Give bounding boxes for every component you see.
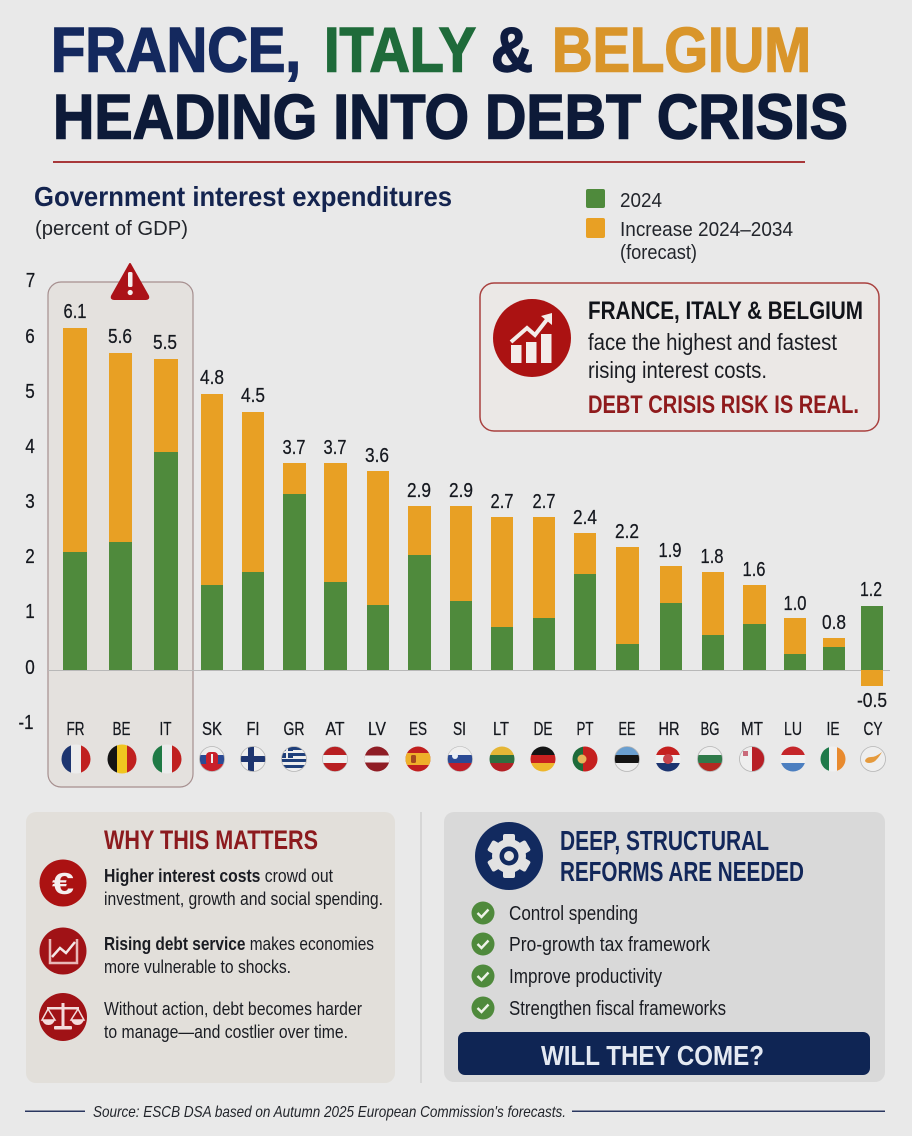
- bar: AT: [324, 437, 347, 670]
- highlight box: France, Belgium, Italy: [48, 282, 193, 787]
- bar: LU: [784, 593, 806, 670]
- item: control spending: [472, 902, 638, 925]
- y axis labels: 3: [25, 491, 35, 513]
- text: rising debt service: more vulnerable to shocks.: [104, 957, 291, 977]
- item: control spending: Control spending: [509, 903, 638, 925]
- bar: LT: 2.7: [490, 491, 514, 513]
- icon: gear: [475, 822, 543, 890]
- flag: Luxembourg: [781, 746, 805, 772]
- legend: [586, 189, 793, 264]
- y axis labels: 1: [25, 601, 35, 623]
- bar: CY: [857, 579, 887, 712]
- country codes: IE: [826, 719, 840, 739]
- flag: Ireland: [820, 747, 846, 771]
- flag: Slovenia: [447, 746, 473, 772]
- icon: declining chart: [40, 928, 86, 974]
- bar: LU: 1.0: [784, 593, 806, 615]
- bar: IE: [822, 612, 846, 670]
- bar: LV: 3.6: [365, 445, 389, 467]
- icon: warning triangle: [112, 264, 148, 299]
- panel heading: REFORMS ARE NEEDED: [560, 856, 804, 887]
- source line: Source: ESCB DSA based on Autumn 2025 European Commission's forecasts.: [93, 1104, 566, 1121]
- flag: Latvia: [364, 746, 390, 772]
- text: without action: to manage—and costlier over time.: [104, 1022, 348, 1042]
- country codes: FI: [246, 719, 260, 739]
- bar: SK: [200, 367, 224, 670]
- flag: France: [61, 744, 91, 774]
- bar: BG: 1.8: [700, 546, 724, 568]
- callout text: rising interest costs.: [588, 357, 767, 383]
- flag: Austria: [322, 746, 348, 772]
- bar: HR: 1.9: [658, 540, 682, 562]
- title: FRANCE,: [51, 15, 301, 85]
- bar: ES: 2.9: [407, 480, 431, 502]
- bar: GR: [282, 437, 306, 670]
- icon: euro: €: [52, 866, 74, 901]
- title: BELGIUM: [552, 15, 811, 85]
- title: ITALY: [324, 15, 476, 85]
- flag: Bulgaria: [697, 746, 723, 772]
- bar: BE: 5.6: [108, 326, 132, 348]
- bar: EE: [615, 521, 639, 670]
- y axis labels: 7: [26, 270, 35, 292]
- country codes: LT: [493, 719, 509, 739]
- bar: PT: [573, 507, 597, 670]
- country codes: GR: [284, 719, 305, 739]
- bar: IE: 0.8: [822, 612, 846, 634]
- flag: Slovakia: [199, 746, 225, 772]
- bar: CY: 1.2: [860, 579, 882, 601]
- bar: ES: [407, 480, 431, 670]
- panel heading: WHY THIS MATTERS: [104, 825, 318, 855]
- bar: FR: [63, 301, 87, 670]
- country codes: BG: [700, 719, 720, 739]
- bar: HR: [658, 540, 682, 670]
- item: pro-growth tax framework: Pro-growth tax framework: [509, 934, 711, 956]
- y axis labels: [18, 270, 35, 734]
- y axis labels: 0: [25, 657, 35, 679]
- country codes: SK: [202, 719, 222, 739]
- panel heading: [560, 825, 804, 887]
- country codes: MT: [741, 719, 763, 739]
- country codes: SI: [453, 719, 466, 739]
- icon: rising chart: [493, 299, 571, 377]
- text: without action: [104, 999, 362, 1042]
- button: will they come: [458, 1032, 870, 1075]
- y axis labels: 4: [25, 436, 35, 458]
- flag: Malta: [739, 746, 765, 772]
- flag: Italy: [152, 744, 182, 774]
- button: will they come: WILL THEY COME?: [541, 1040, 764, 1071]
- country codes: PT: [576, 719, 594, 739]
- flag: Belgium: [107, 744, 137, 774]
- text: rising debt service: [104, 934, 374, 977]
- country codes: FR: [66, 719, 84, 739]
- country codes: IT: [160, 719, 172, 739]
- checklist: [472, 902, 726, 1020]
- text: without action: Without action, debt becomes harder: [104, 999, 362, 1019]
- country codes: ES: [409, 719, 427, 739]
- callout text: [588, 297, 863, 419]
- bar: MT: [742, 559, 766, 670]
- bar: PT: 2.4: [573, 507, 597, 529]
- bar: BG: [700, 546, 724, 670]
- flag: Germany: [530, 746, 556, 772]
- legend: 2024: [620, 190, 662, 212]
- text: higher interest costs: [104, 866, 383, 909]
- title: HEADING INTO DEBT CRISIS: [53, 82, 848, 152]
- bar: GR: 3.7: [282, 437, 306, 459]
- text: higher interest costs: investment, growth and social spending.: [104, 889, 383, 909]
- bar: CY: -0.5: [857, 690, 887, 712]
- bar: MT: 1.6: [742, 559, 766, 581]
- callout: highest interest costs: [480, 283, 879, 431]
- country codes: HR: [658, 719, 680, 739]
- flag: Greece: [281, 746, 307, 772]
- bar: IT: 5.5: [153, 332, 177, 354]
- y axis labels: 2: [25, 546, 35, 568]
- text: rising debt service: Rising debt service makes economies: [104, 934, 374, 954]
- title: &: [491, 15, 533, 85]
- item: strengthen fiscal frameworks: [472, 996, 726, 1020]
- flag: Croatia: [656, 746, 680, 772]
- flags row: [61, 744, 886, 774]
- panel: why this matters: [26, 812, 395, 1083]
- flag: Estonia: [614, 746, 640, 772]
- item: improve productivity: Improve productivity: [509, 966, 662, 988]
- bar: DE: 2.7: [532, 491, 556, 513]
- panel heading: DEEP, STRUCTURAL: [560, 825, 769, 856]
- country codes: AT: [326, 719, 344, 739]
- y axis labels: -1: [18, 712, 34, 734]
- bar: AT: 3.7: [324, 437, 346, 459]
- bar: LV: [365, 445, 389, 670]
- bar: EE: 2.2: [615, 521, 639, 543]
- panel: structural reforms: [444, 812, 885, 1082]
- callout text: FRANCE, ITALY & BELGIUM: [588, 297, 863, 325]
- bar: DE: [532, 491, 556, 670]
- chart heading: (percent of GDP): [35, 217, 188, 240]
- country codes: [66, 719, 882, 739]
- flag: Spain: [405, 746, 431, 772]
- bar: LT: [490, 491, 514, 670]
- callout text: face the highest and fastest: [588, 329, 838, 355]
- flag: Finland: [240, 746, 266, 772]
- bar: FI: [241, 385, 265, 670]
- text: higher interest costs: Higher interest costs crowd out: [104, 866, 333, 886]
- country codes: LV: [368, 719, 386, 739]
- legend: (forecast): [620, 242, 697, 264]
- country codes: BE: [112, 719, 130, 739]
- icon: scales: [39, 993, 87, 1041]
- bar: FI: 4.5: [241, 385, 265, 407]
- title: [51, 15, 848, 152]
- country codes: EE: [618, 719, 636, 739]
- flag: Lithuania: [489, 746, 515, 772]
- flag: Portugal: [572, 746, 598, 772]
- bar chart: [18, 264, 890, 787]
- item: improve productivity: [472, 964, 662, 988]
- bar: SI: [449, 480, 473, 670]
- bar: FR: 6.1: [64, 301, 86, 323]
- bar: IT: [153, 332, 178, 670]
- legend: Increase 2024–2034: [620, 219, 793, 241]
- icon: euro: [40, 860, 86, 906]
- y axis labels: 6: [25, 326, 35, 348]
- y axis labels: 5: [25, 381, 35, 403]
- country codes: LU: [784, 719, 802, 739]
- bar: SK: 4.8: [200, 367, 224, 389]
- bar: SI: 2.9: [449, 480, 473, 502]
- flag: Cyprus: [860, 746, 886, 772]
- country codes: CY: [864, 719, 882, 739]
- country codes: DE: [534, 719, 552, 739]
- chart heading: [34, 181, 452, 240]
- bar: BE: [108, 326, 132, 670]
- chart heading: Government interest expenditures: [34, 181, 452, 212]
- item: strengthen fiscal frameworks: Strengthen fiscal frameworks: [509, 998, 726, 1020]
